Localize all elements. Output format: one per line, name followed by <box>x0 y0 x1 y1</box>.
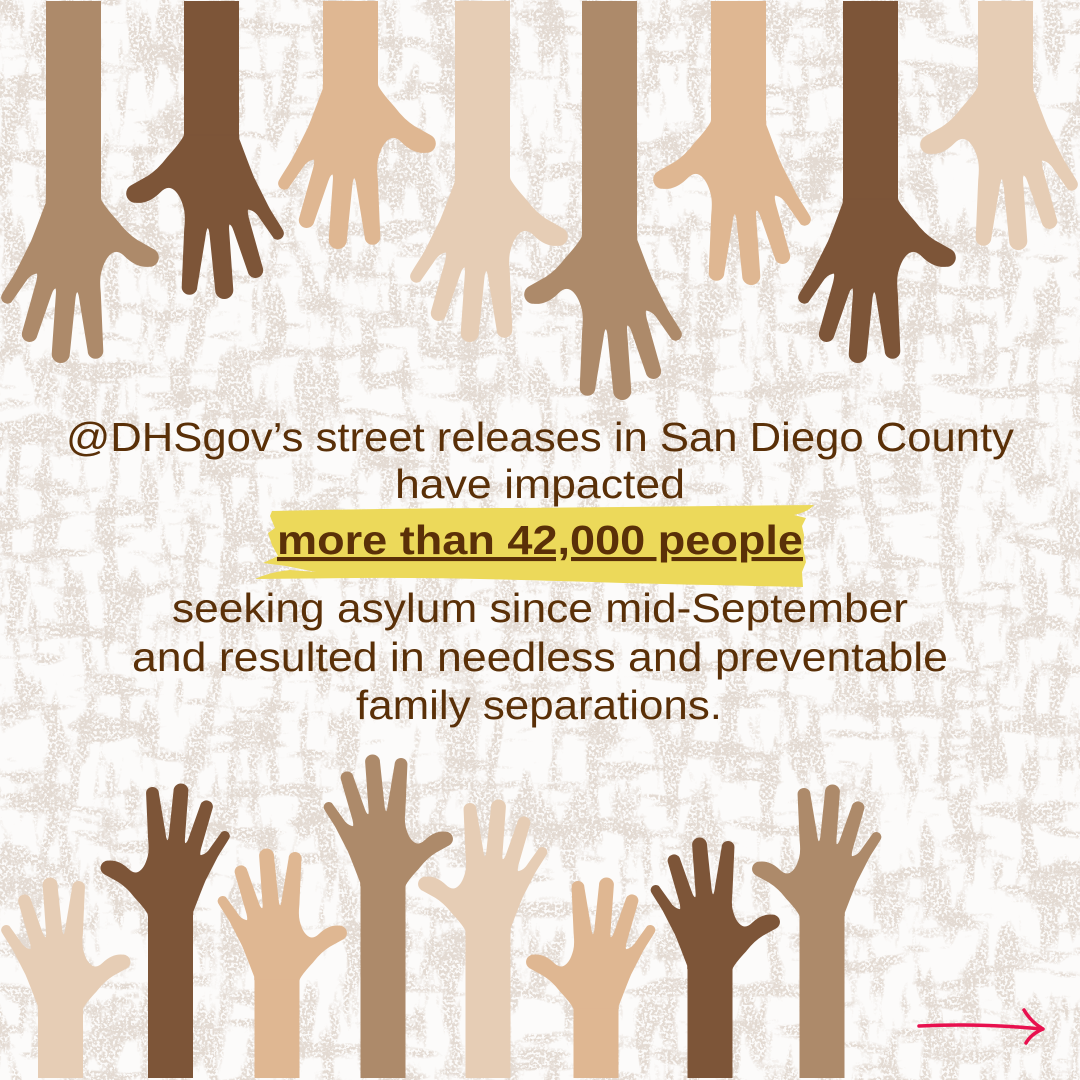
raised hand 8: medium brown <box>753 785 881 1078</box>
raised hand 2: dark brown <box>101 784 229 1078</box>
hand 7: dark brown, reaching down <box>799 1 955 362</box>
raised hand 6: tan <box>527 878 655 1078</box>
hand 3: tan, reaching down <box>279 1 435 248</box>
arrow: next page <box>919 1010 1043 1043</box>
hand 5: medium brown, reaching down <box>525 1 681 399</box>
hand 4: light, reaching down <box>411 1 567 341</box>
yellow brush highlight <box>255 505 814 587</box>
line 1: @DHSgov’s street releases in San Diego County <box>66 414 1015 460</box>
raised hand 5: light <box>419 800 547 1078</box>
raised hand 3: tan <box>218 849 346 1078</box>
line 5: and resulted in needless and preventable <box>132 634 948 680</box>
raised hand 4: medium brown <box>324 755 452 1078</box>
key figure: more than 42,000 people: more than 42,000 people <box>277 517 803 563</box>
line 2: have impacted <box>395 461 685 507</box>
top row of reaching hands <box>2 1 1077 399</box>
main message text <box>66 414 1015 728</box>
bottom row of raised hands <box>2 755 881 1078</box>
line 4: seeking asylum since mid-September <box>172 585 908 631</box>
hand 1: medium brown, reaching down <box>2 1 158 362</box>
raised hand 7: dark brown <box>651 838 779 1078</box>
hand 6: tan, reaching down <box>654 1 810 284</box>
hand 2: dark brown, reaching down <box>127 1 283 298</box>
hand 8: light, reaching down <box>921 1 1077 249</box>
line 6: family separations. <box>356 682 722 728</box>
raised hand 1: light <box>2 878 130 1078</box>
